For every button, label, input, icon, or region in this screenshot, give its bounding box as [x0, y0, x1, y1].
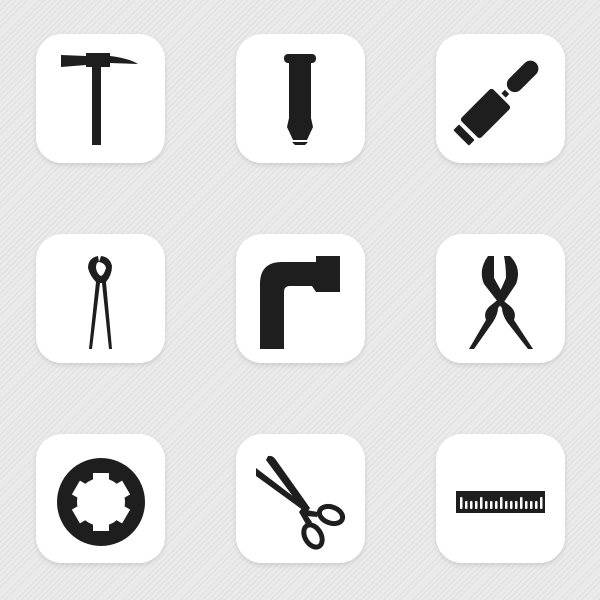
icon: pincers	[88, 256, 112, 349]
icon: ruler	[456, 491, 545, 513]
icon: pick hammer	[61, 53, 138, 145]
icon: pipe elbow	[260, 256, 340, 349]
icon: scissors	[256, 456, 345, 550]
icon: chisel	[451, 53, 546, 148]
tiles	[36, 34, 565, 563]
icon: chisel handle	[284, 54, 316, 145]
icon: pruning shears	[469, 256, 533, 349]
icon: gear ring	[57, 458, 145, 546]
